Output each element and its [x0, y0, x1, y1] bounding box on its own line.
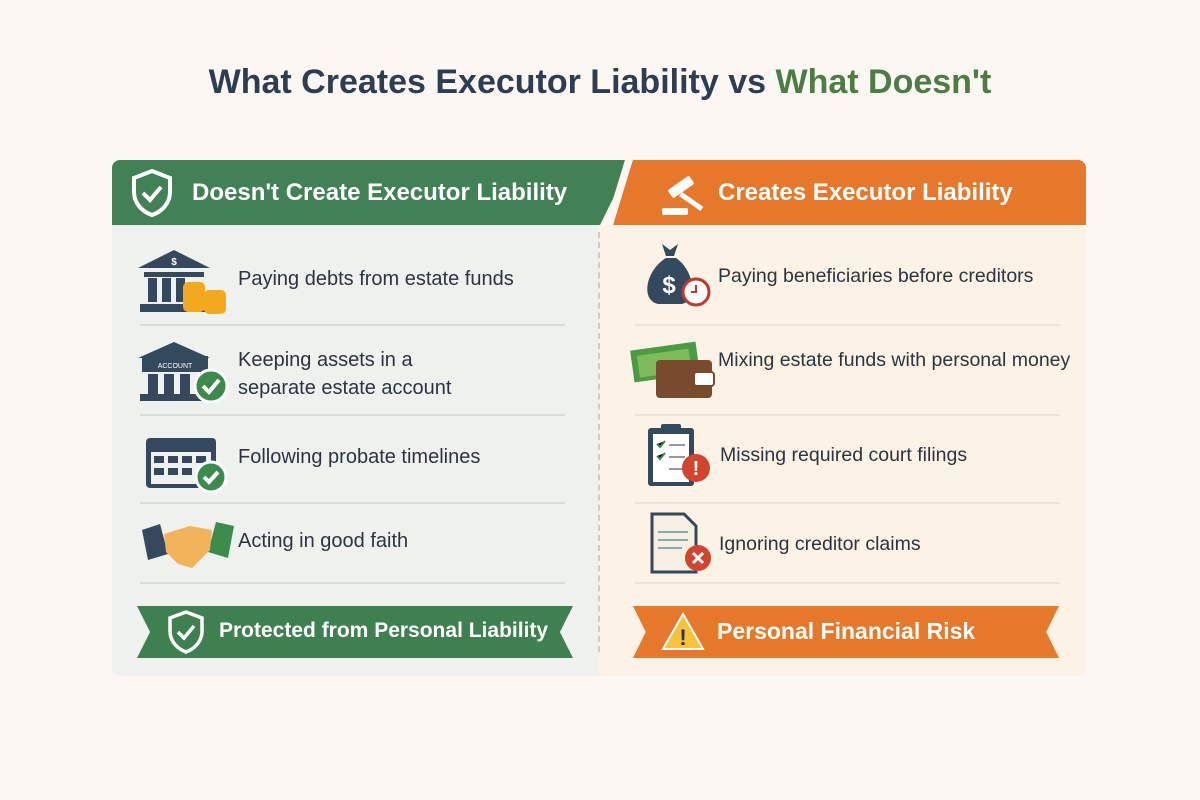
text [238, 349, 452, 399]
header: orange [598, 160, 1086, 225]
banner: protected [137, 606, 573, 658]
text: Paying debts from estate funds [238, 268, 514, 290]
icon: shield [168, 610, 204, 654]
heading: doesn't create: Doesn't Create Executor Liability [192, 179, 567, 206]
text: Personal Financial Risk [717, 618, 975, 644]
panel: doesn't create liability [112, 160, 599, 676]
divider stripe [605, 160, 633, 225]
text: Missing required court filings [720, 444, 967, 466]
icon: bank coins [138, 250, 226, 314]
icon: warning: ! [679, 625, 687, 650]
text: Paying beneficiaries before creditors [718, 265, 1033, 287]
text: Protected from Personal Liability [219, 619, 548, 642]
text: Keeping assets in a [238, 349, 413, 371]
icon: calendar [146, 438, 228, 494]
icon: cash wallet [630, 342, 715, 398]
icon: clipboard alert [648, 424, 710, 486]
row: good faith [142, 522, 408, 568]
icon: gavel [662, 176, 704, 215]
row: ignoring claims [650, 512, 921, 574]
icon: bank coins: $ [171, 257, 177, 268]
text: Acting in good faith [238, 530, 408, 552]
icon: money bag clock [647, 244, 710, 306]
icon: estate account: ACCOUNT [158, 363, 193, 370]
banner: risk [633, 606, 1059, 658]
row: paying beneficiaries [647, 244, 1033, 306]
icon: estate account [138, 342, 228, 404]
row: separate account [138, 342, 452, 404]
heading: creates: Creates Executor Liability [718, 179, 1013, 206]
header: green [112, 160, 632, 225]
text: Following probate timelines [238, 446, 480, 468]
icon: warning [661, 612, 705, 650]
text: Ignoring creditor claims [719, 533, 921, 555]
row: mixing funds [630, 342, 1070, 398]
row: court filings [648, 424, 967, 486]
text: separate estate account [238, 377, 451, 399]
icon: document x [650, 512, 711, 574]
dashed divider [598, 232, 600, 652]
icon: money bag clock: $ [662, 272, 676, 299]
icon: handshake [142, 522, 234, 568]
icon: clipboard alert: ! [693, 458, 699, 480]
row: paying debts [138, 250, 514, 314]
panel: creates liability [599, 160, 1086, 676]
text: Mixing estate funds with personal money [718, 349, 1070, 371]
icon: shield check header [132, 168, 172, 218]
title: What Creates Executor Liability vs What Doesn't [209, 63, 991, 101]
row: timelines [146, 438, 480, 494]
